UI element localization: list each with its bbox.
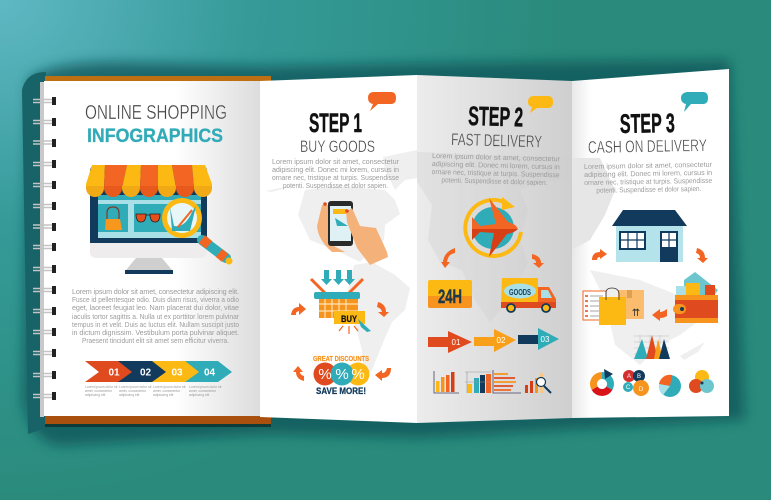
heading: fast delivery: FAST DELIVERY <box>451 130 542 151</box>
icon: wallet <box>673 272 718 323</box>
chevron arrows 01-04: 02 <box>140 368 151 378</box>
text: step 2 paragraph: potenti. Suspendisse et dolor sapien. <box>441 175 548 187</box>
arrow to wallet <box>652 309 667 321</box>
icon: shop monitor <box>86 165 232 274</box>
heading: cash on delivery: CASH ON DELIVERY <box>588 136 707 157</box>
quadrant chart: D <box>639 387 644 393</box>
heading: step 3: STEP 3 <box>620 108 675 139</box>
text: cover paragraph: iaculis tortor sagittis a. Nulla ut ex porttitor lorem pulvinar <box>72 312 240 321</box>
bar charts <box>434 370 551 393</box>
text: step 3 paragraph: ornare nec, tristique at turpis. Suspendisse <box>584 176 712 187</box>
arrows around step 2 <box>441 248 544 268</box>
chevron arrows 01-04 <box>85 361 232 382</box>
heading: online shopping: ONLINE SHOPPING <box>85 101 227 124</box>
small captions: adipiscing elit <box>119 393 139 397</box>
badge: 24H <box>428 280 472 308</box>
speech bubble: step 1 <box>368 92 396 111</box>
small captions: Lorem ipsum dolor sit <box>189 385 221 389</box>
text: save more: SAVE MORE! <box>316 386 366 396</box>
quadrant chart: B <box>637 374 641 380</box>
small captions: adipiscing elit <box>85 393 105 397</box>
donut chart <box>593 369 613 393</box>
arrows around step 1 <box>291 302 391 381</box>
text: step 1 paragraph: ornare nec, tristique at turpis. Suspendisse <box>272 173 399 182</box>
text: step 2 paragraph: Lorem ipsum dolor sit amet, consectetur <box>432 151 561 163</box>
process arrows 01-03: 03 <box>541 335 550 344</box>
venn diagram <box>689 370 714 393</box>
heading: step 2: STEP 2 <box>468 101 524 132</box>
text: step 3 paragraph <box>584 160 713 195</box>
small captions: amet, consectetur <box>119 389 147 393</box>
pie chart <box>659 375 681 397</box>
small captions: Lorem ipsum dolor sit <box>153 385 185 389</box>
speech bubble: step 3 <box>681 92 708 112</box>
text: step 2 paragraph <box>431 151 561 187</box>
heading: step 1: STEP 1 <box>309 108 362 138</box>
icon: delivery truck: GOODS <box>509 288 531 297</box>
text: cover paragraph: tempus in et velit. Duis ac luctus elit. Nullam suscipit justo <box>72 320 239 329</box>
process arrows 01-03: 02 <box>497 336 506 345</box>
process arrows 01-03 <box>428 328 559 353</box>
text: cover paragraph: Praesent tincidunt elit sit amet sem efficitur viverra. <box>82 336 229 345</box>
panel: step 3 <box>572 69 729 418</box>
icon: sunglasses <box>136 214 160 222</box>
text: great discounts: GREAT DISCOUNTS <box>313 356 369 363</box>
text: cover paragraph: in dictum dignissim. Vestibulum porta pulvinar aliquet. <box>72 328 239 337</box>
text: step 1 paragraph <box>272 157 400 190</box>
process arrows 01-03: 01 <box>452 338 461 347</box>
quadrant chart: C <box>626 385 631 391</box>
text: step 2 paragraph: adipiscing elit. Donec mi lorem, cursus in <box>432 159 560 171</box>
icon: basket: BUY <box>341 314 358 325</box>
text: step 2 paragraph: ornare nec, tristique at turpis. Suspendisse <box>432 167 560 179</box>
awning <box>86 165 212 197</box>
icon: percent badges <box>314 362 370 386</box>
small captions: adipiscing elit <box>153 393 173 397</box>
small captions: Lorem ipsum dolor sit <box>119 385 151 389</box>
chevron arrows 01-04: 04 <box>204 368 215 378</box>
chevron arrows 01-04: 01 <box>108 368 120 378</box>
text: step 3 paragraph: potenti. Suspendisse et dolor sapien. <box>596 184 701 195</box>
text: step 3 paragraph: adipiscing elit. Donec mi lorem, cursus in <box>584 168 712 179</box>
small captions: amet, consectetur <box>85 389 113 393</box>
icon: percent badges: % <box>335 366 349 383</box>
chevron arrows 01-04: 03 <box>171 368 183 378</box>
icon: handbag <box>105 207 122 230</box>
shadows <box>22 60 745 446</box>
heading: infographics: INFOGRAPHICS <box>87 126 223 147</box>
panel: step 1 <box>260 75 417 423</box>
text: cover paragraph <box>72 287 240 345</box>
icon: basket <box>311 270 371 334</box>
icon: house <box>612 210 687 262</box>
icon: magnifier <box>162 198 232 264</box>
world map <box>265 150 705 378</box>
icon: percent badges: % <box>318 366 332 383</box>
text: cover paragraph: Fusce id pellentesque odio. Duis diam risus, viverra a odio <box>72 295 239 304</box>
icon: hand with phone <box>317 201 388 265</box>
small captions: Lorem ipsum dolor sit <box>85 385 117 389</box>
badge: 24H: 24H <box>438 287 462 308</box>
icon: percent badges: % <box>351 366 365 383</box>
speech bubble: step 2 <box>528 96 553 113</box>
quadrant chart: A <box>627 374 631 380</box>
icon: clipboard, bag and box <box>583 288 644 325</box>
text: step 1 paragraph: adipiscing elit. Donec mi lorem, cursus in <box>272 165 399 174</box>
icon: plane and globe <box>465 197 521 257</box>
small captions: amet, consectetur <box>189 389 217 393</box>
small captions: adipiscing elit <box>189 393 209 397</box>
icon: delivery truck <box>501 278 556 312</box>
text: cover paragraph: eget, laoreet feugiat leo. Nam placerat dui dolor, vitae <box>72 303 239 312</box>
spiral binding <box>33 97 56 400</box>
text: step 1 paragraph: potenti. Suspendisse et dolor sapien. <box>283 181 388 190</box>
heading: buy goods: BUY GOODS <box>300 137 375 156</box>
icon: clipboard, bag and box: ⇈ <box>632 308 640 319</box>
panel: step 2 <box>417 75 572 423</box>
text: step 1 paragraph: Lorem ipsum dolor sit amet, consectetur <box>272 157 400 166</box>
notebook cover <box>45 76 271 427</box>
triangle chart <box>634 335 670 359</box>
text: cover paragraph: Lorem ipsum dolor sit amet, consectetur adipiscing elit. <box>72 287 239 296</box>
text: step 3 paragraph: Lorem ipsum dolor sit amet, consectetur <box>584 160 713 171</box>
arrows around step 3 <box>592 248 708 263</box>
small captions: amet, consectetur <box>153 389 181 393</box>
small captions <box>85 385 221 397</box>
quadrant chart <box>623 370 649 396</box>
panel: cover page <box>33 81 261 417</box>
